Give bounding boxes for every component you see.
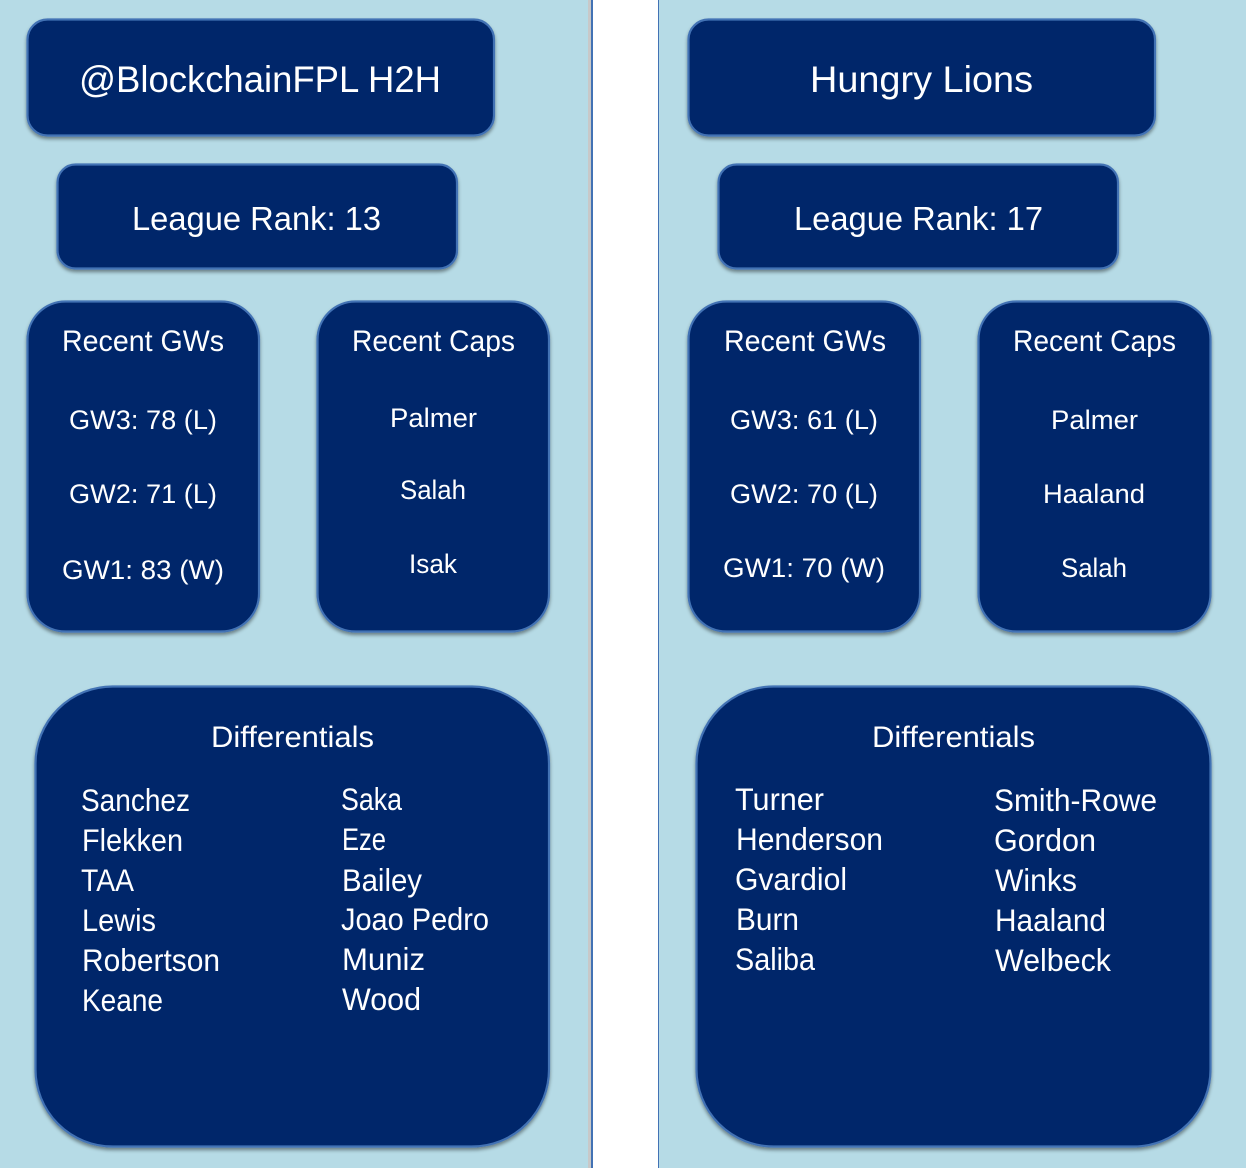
list: left differentials column 2: Joao Pedro <box>341 901 489 937</box>
list: right differentials column 1: Saliba <box>735 941 815 977</box>
card: right recent captains: Haaland <box>1043 479 1145 509</box>
card: right recent captains: Palmer <box>1051 405 1138 435</box>
panel: left team <box>28 20 549 1146</box>
list: left differentials column 2: Eze <box>342 821 386 857</box>
list: right differentials column 1 <box>735 781 883 977</box>
card: left recent captains: Palmer <box>390 403 477 433</box>
card: left differentials <box>36 686 549 1146</box>
title: right team name <box>688 20 1155 136</box>
panel: left team background <box>0 0 593 1168</box>
title: left team name <box>28 20 494 136</box>
list: left differentials column 2: Muniz <box>342 941 425 977</box>
list: right differentials column 2: Smith-Rowe <box>994 782 1157 818</box>
card: left recent gameweeks <box>28 302 259 632</box>
title: right team name: Hungry Lions <box>810 59 1033 100</box>
list: left differentials column 2: Bailey <box>342 862 422 898</box>
card: left recent gameweeks: GW3: 78 (L) <box>69 405 217 435</box>
title: left team name: @BlockchainFPL H2H <box>79 59 441 100</box>
panel: right team <box>688 20 1210 1146</box>
list: left differentials column 1: Lewis <box>82 902 156 938</box>
list: left differentials column 1: TAA <box>81 862 134 898</box>
card: left recent captains: Recent Caps <box>352 325 515 358</box>
card: right recent gameweeks: GW2: 70 (L) <box>730 479 878 509</box>
card: left recent captains: Salah <box>400 475 466 505</box>
list: right differentials column 2: Haaland <box>995 902 1106 938</box>
card: left recent gameweeks: GW2: 71 (L) <box>69 479 217 509</box>
list: right differentials column 1: Burn <box>736 901 799 937</box>
list: right differentials column 1: Turner <box>735 781 824 817</box>
list: left differentials column 1: Keane <box>82 982 163 1018</box>
card: right recent gameweeks: GW3: 61 (L) <box>730 405 878 435</box>
card: left differentials: Differentials <box>211 721 374 754</box>
league rank: right team: League Rank: 17 <box>794 200 1043 237</box>
card: right recent captains: Salah <box>1061 553 1127 583</box>
league rank: right team <box>718 164 1118 268</box>
card: right differentials <box>696 686 1210 1146</box>
list: right differentials column 1: Gvardiol <box>735 861 847 897</box>
list: left differentials column 1: Flekken <box>82 822 183 858</box>
list: left differentials column 2: Wood <box>342 981 421 1017</box>
card: left recent gameweeks: Recent GWs <box>62 325 224 358</box>
list: left differentials column 1 <box>81 782 220 1018</box>
card: right recent captains: Recent Caps <box>1013 325 1176 358</box>
card: right recent gameweeks: Recent GWs <box>724 325 886 358</box>
list: right differentials column 2: Winks <box>995 862 1077 898</box>
list: left differentials column 1: Robertson <box>82 942 220 978</box>
panel: right team background <box>658 0 1246 1168</box>
card: left recent captains <box>318 302 549 632</box>
card: left recent gameweeks: GW1: 83 (W) <box>62 555 224 585</box>
list: left differentials column 2 <box>341 781 489 1017</box>
list: left differentials column 1: Sanchez <box>81 782 190 818</box>
list: right differentials column 2 <box>994 782 1157 978</box>
list: right differentials column 2: Welbeck <box>995 942 1111 978</box>
league rank: left team <box>58 164 457 268</box>
list: left differentials column 2: Saka <box>341 781 402 817</box>
card: right differentials: Differentials <box>872 721 1035 754</box>
card: right recent captains <box>978 302 1210 632</box>
list: right differentials column 1: Henderson <box>736 821 883 857</box>
card: right recent gameweeks: GW1: 70 (W) <box>723 553 885 583</box>
league rank: left team: League Rank: 13 <box>132 200 381 237</box>
list: right differentials column 2: Gordon <box>994 822 1096 858</box>
card: right recent gameweeks <box>688 302 920 632</box>
card: left recent captains: Isak <box>409 549 458 579</box>
